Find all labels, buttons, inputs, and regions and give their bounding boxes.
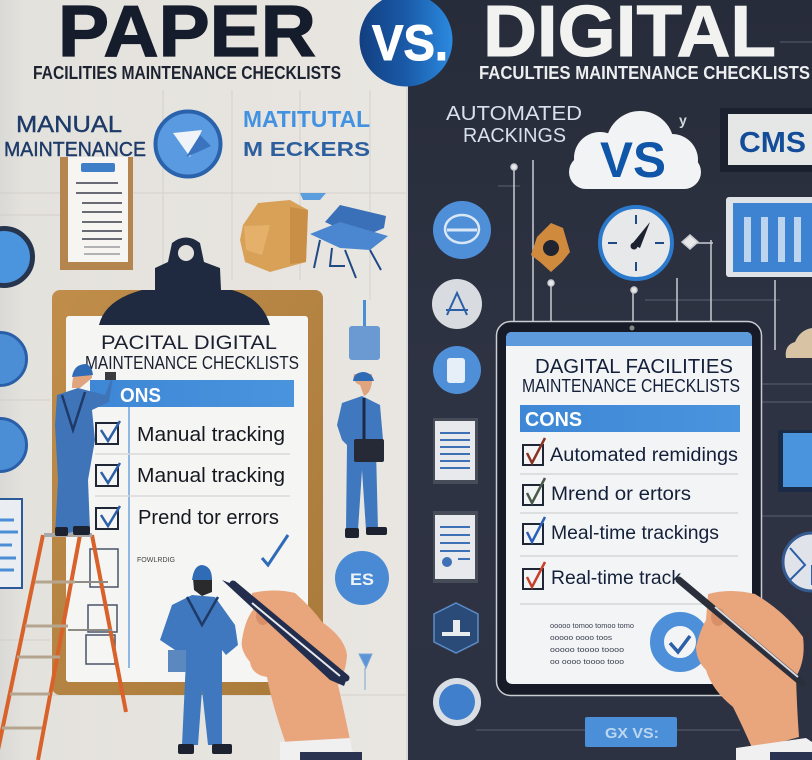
small status text bbox=[550, 623, 634, 666]
heading: manual checkers: M ECKERS bbox=[243, 139, 370, 161]
heading: automated tracking: RACKINGS bbox=[463, 125, 566, 147]
faint checkboxes bbox=[86, 549, 118, 664]
cons bar: digital bbox=[520, 405, 740, 432]
small note text: FOWLRDIG bbox=[137, 557, 175, 564]
checkbox row 2: Manual tracking bbox=[137, 465, 285, 487]
checkbox row 3: Meal-time trackings bbox=[551, 523, 719, 544]
icon: grey circle bbox=[432, 279, 482, 329]
checkbox row 2 bbox=[96, 463, 285, 487]
small marker: x: y bbox=[679, 112, 687, 128]
checkbox row 4 bbox=[523, 562, 682, 589]
icon: document one bbox=[433, 418, 478, 484]
checkbox row 3 bbox=[523, 517, 719, 544]
heading: manual maintenance bbox=[4, 111, 146, 161]
checkbox row 1: Automated remidings bbox=[550, 445, 738, 466]
small status text: ooooo tomoo tomoo tomo bbox=[550, 623, 634, 630]
hand with pen: paper bbox=[222, 580, 362, 760]
blue tick bbox=[262, 535, 288, 565]
donut check bbox=[657, 619, 703, 665]
hand with pen: digital bbox=[679, 580, 812, 760]
clipboard clamp bbox=[99, 238, 270, 325]
decorative connector lines: digital bbox=[511, 160, 775, 350]
checkbox row 1 bbox=[523, 438, 738, 466]
checklist heading: digital bbox=[522, 356, 740, 396]
icon: round button bbox=[433, 678, 481, 726]
small status text: ooooo oooo toos bbox=[550, 635, 613, 642]
heading: manual maintenance: MANUAL bbox=[16, 111, 122, 137]
cloud: VS bbox=[569, 111, 701, 189]
icon: cardboard box bbox=[240, 200, 308, 272]
heading: manual checkers: MATITUTAL bbox=[243, 106, 370, 132]
button: VS bbox=[585, 717, 677, 747]
worker on ladder bbox=[55, 364, 116, 536]
tablet bbox=[496, 322, 762, 696]
icon: shield bbox=[434, 603, 478, 653]
checklist heading: digital: MAINTENANCE CHECKLISTS bbox=[522, 376, 740, 396]
cons bar: digital: CONS bbox=[525, 409, 582, 431]
icon: orange shape bbox=[531, 223, 570, 272]
checkbox row 2 bbox=[523, 478, 691, 505]
icon: left edge chart panel bbox=[0, 499, 22, 588]
panel: right edge blue screen bbox=[778, 430, 812, 492]
checklist heading: paper bbox=[85, 333, 299, 373]
panel: CMS bbox=[720, 108, 812, 172]
panel: paper side background bbox=[0, 0, 406, 760]
icon: blue check badge bbox=[156, 112, 220, 176]
VS badge bbox=[360, 0, 452, 86]
icon: left circle 3 bbox=[0, 418, 26, 472]
icon: beige cloud bbox=[786, 328, 812, 358]
panel: CMS: CMS bbox=[739, 127, 806, 159]
icon: left circle 2 bbox=[0, 332, 26, 386]
subtitle: paper side: FACILITIES MAINTENANCE CHECKLISTS bbox=[33, 63, 341, 83]
checklist: paper items bbox=[86, 407, 290, 668]
small status text: ooooo toooo toooo bbox=[550, 647, 624, 654]
panel: digital side background bbox=[406, 0, 812, 760]
heading: manual checkers bbox=[243, 106, 370, 161]
cloud: VS: VS bbox=[600, 132, 666, 188]
cons bar: paper bbox=[90, 380, 294, 407]
checkbox row 4: Real-time track bbox=[551, 568, 682, 589]
badge: ES bbox=[335, 551, 389, 605]
checkbox row 1 bbox=[96, 421, 285, 446]
clipboard board bbox=[52, 290, 323, 695]
clipboard paper sheet bbox=[66, 316, 308, 682]
badge: ES: ES bbox=[350, 570, 374, 589]
checkbox row 3: Prend tor errors bbox=[138, 507, 279, 529]
icon: small blue tag bbox=[300, 193, 326, 200]
standing worker with case bbox=[337, 372, 387, 538]
VS badge: VS. bbox=[372, 15, 448, 71]
checkbox row 2: Mrend or ertors bbox=[551, 484, 691, 505]
button: VS: GX VS: bbox=[605, 725, 659, 742]
icon: blue hand circle bbox=[433, 346, 481, 394]
icon: document two bbox=[433, 511, 478, 583]
checkbox row 1: Manual tracking bbox=[137, 424, 285, 446]
checklist heading: paper: PACITAL DIGITAL bbox=[101, 333, 277, 354]
icon: right edge gauge bbox=[783, 533, 812, 591]
cons bar: paper: ONS bbox=[120, 385, 161, 407]
icon: clock bbox=[600, 207, 672, 279]
icon: small clipboard checklist bbox=[60, 157, 133, 270]
icon: blue desk with books bbox=[310, 205, 388, 278]
icon: hanging tag bbox=[349, 300, 380, 360]
checklist: digital items bbox=[520, 438, 738, 666]
heading: automated tracking: AUTOMATED bbox=[446, 103, 582, 125]
ladder bbox=[0, 535, 126, 760]
worker in front bbox=[160, 565, 238, 754]
checklist heading: digital: DAGITAL FACILITIES bbox=[535, 356, 733, 378]
icon: left circle 1 bbox=[0, 228, 32, 286]
small status text: oo oooo toooo tooo bbox=[550, 659, 624, 666]
panel: blue bar chart bbox=[726, 197, 812, 277]
icon: blue circle bbox=[433, 201, 491, 259]
heading: automated tracking bbox=[446, 103, 582, 147]
icon: small pin bbox=[359, 654, 372, 690]
heading: manual maintenance: MAINTENANCE bbox=[4, 139, 146, 161]
checklist heading: paper: MAINTENANCE CHECKLISTS bbox=[85, 353, 299, 373]
